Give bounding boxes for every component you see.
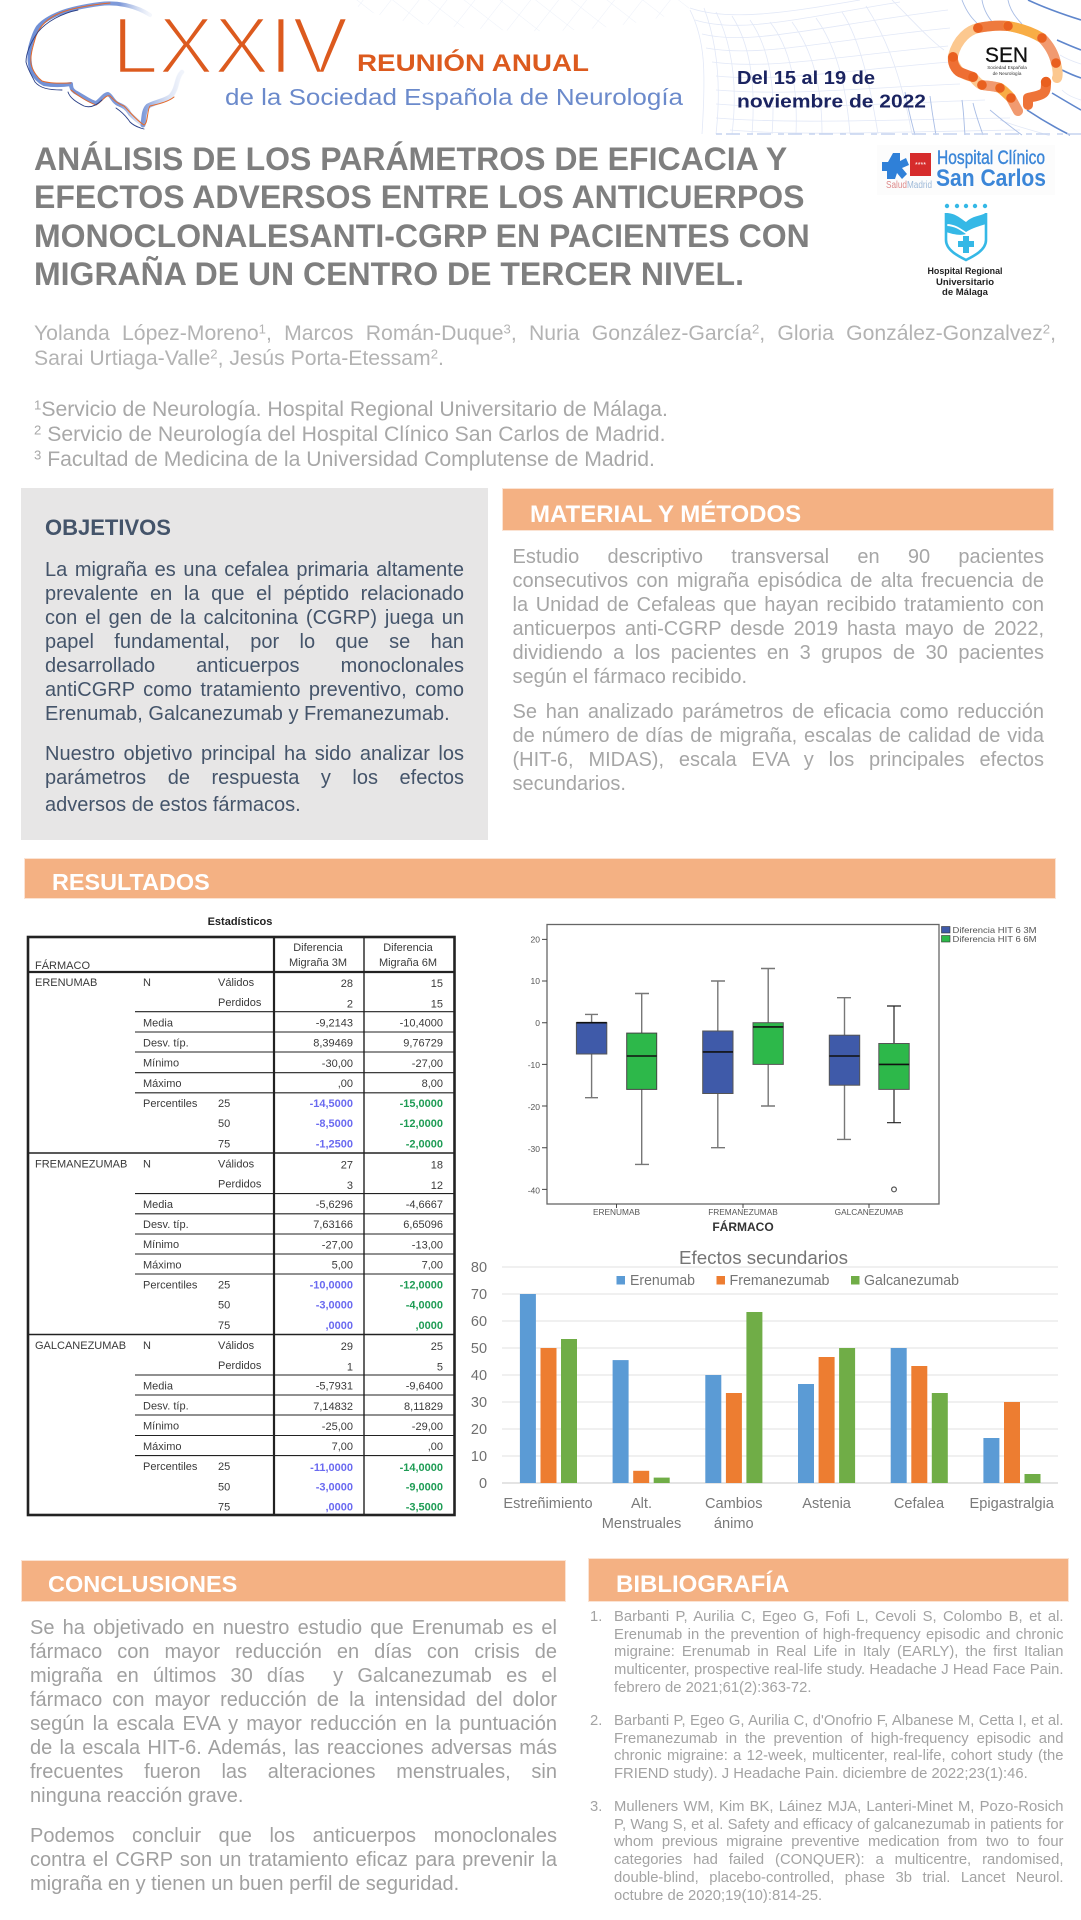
LXXIV numeral: LXXIV — [112, 1, 349, 90]
table group: galcanezumab: GALCANEZUMAB — [35, 1340, 126, 1352]
text: conclusiones — [30, 1617, 557, 1895]
text: reference 1 — [590, 1609, 1064, 1696]
table group: fremanezumab: -4,6667 — [406, 1199, 443, 1211]
table group: galcanezumab: -11,0000 — [310, 1462, 353, 1474]
y axis: -10 — [528, 1060, 540, 1070]
box: Erenumab 3M — [576, 1014, 607, 1098]
table group: erenumab: Percentiles — [143, 1098, 198, 1110]
text: reference 3: P, Wang S, et al. Safety and efficacy of galcanezumab in patients for — [614, 1817, 1064, 1833]
table group: fremanezumab: -5,6296 — [316, 1199, 353, 1211]
authors — [34, 321, 1056, 370]
text: conclusiones: según la escala EVA y mayor reducción en la puntuación — [30, 1713, 557, 1735]
y axis labels: 70 — [471, 1287, 487, 1303]
table group: galcanezumab: -14,0000 — [400, 1462, 443, 1474]
text: objetivos paragraph 2: adversos de estos fármacos. — [45, 794, 301, 816]
y axis: 20 — [531, 934, 540, 944]
table group: erenumab: -10,4000 — [400, 1018, 443, 1030]
table group: fremanezumab: ,0000 — [415, 1320, 443, 1332]
text: objetivos paragraph 1: papel fundamental, por lo que se han — [45, 631, 464, 653]
box: Galcanezumab 3M — [829, 998, 860, 1139]
table group: galcanezumab: Perdidos — [218, 1360, 262, 1372]
bars: Erenumab — [520, 1294, 999, 1483]
table group: fremanezumab: 18 — [431, 1160, 443, 1172]
table group: fremanezumab: 75 — [218, 1320, 230, 1332]
text: reference 2: FRIEND study). J Headache Pain. diciembre de 2022;23(1):46. — [614, 1766, 1028, 1782]
table header — [35, 942, 437, 972]
heading bar: bibliografía — [588, 1558, 1069, 1602]
table group: fremanezumab: 27 — [341, 1160, 353, 1172]
box plot chart — [528, 924, 1037, 1234]
table group: fremanezumab: Máximo — [143, 1259, 182, 1271]
table group: galcanezumab: 5 — [437, 1362, 443, 1374]
logo: Hospital Regional Universitario de Málaga: Hospital Regional — [928, 266, 1002, 277]
table group: fremanezumab: Válidos — [218, 1158, 255, 1170]
text: conclusiones: ninguna reacción grave. — [30, 1785, 243, 1807]
gridlines — [502, 1267, 1058, 1456]
text: reference 1: Erenumab in the prevention of high-frequency episodic and chronic — [614, 1627, 1064, 1643]
table group: fremanezumab: Media — [143, 1199, 174, 1211]
table grid — [28, 937, 455, 1516]
text: conclusiones: de la escala HIT-6. Además, las reacciones adversas más — [30, 1737, 557, 1759]
table group: erenumab: Máximo — [143, 1078, 182, 1090]
table group: galcanezumab: ,00 — [428, 1441, 443, 1453]
y axis — [528, 934, 869, 1208]
table group: fremanezumab: N — [143, 1158, 151, 1170]
table group: galcanezumab: 29 — [341, 1341, 353, 1353]
table group: fremanezumab: 5,00 — [332, 1260, 353, 1272]
x axis title: FÁRMACO — [712, 1219, 774, 1234]
table group: erenumab: 15 — [431, 998, 443, 1010]
text: conclusiones: frecuentes fueron las alteraciones menstruales, sin — [30, 1761, 557, 1783]
bar chart: efectos secundarios — [471, 1247, 1058, 1532]
text: reference 3 — [590, 1799, 1064, 1904]
affiliations — [34, 397, 668, 471]
text: objetivos paragraph 1: prevalente en la que el péptido relacionado — [45, 583, 464, 605]
text: objetivos paragraph 1: antiCGRP como tratamiento preventivo, como — [45, 679, 464, 701]
table group: galcanezumab: 1 — [347, 1362, 353, 1374]
text: material y métodos: (HIT-6, MIDAS), escala EVA y los principales efectos — [512, 749, 1044, 771]
y axis labels: 20 — [471, 1422, 487, 1438]
table group: erenumab: 2 — [347, 998, 353, 1010]
text: reference 1: Barbanti P, Aurilia C, Egeo G, Fofi L, Cevoli S, Colombo B, et al. — [614, 1609, 1064, 1625]
box plot legend: Diferencia HIT 6 6M — [952, 934, 1037, 944]
heading bar: conclusiones — [21, 1560, 566, 1602]
text: material y métodos: Se han analizado parámetros de eficacia como reducción — [512, 701, 1044, 723]
logo: Hospital Regional Universitario de Málaga: Universitario — [936, 277, 994, 288]
box: Galcanezumab 6M — [879, 1006, 909, 1192]
table group: erenumab — [35, 977, 443, 1150]
text: material y métodos — [512, 546, 1044, 795]
table group: fremanezumab: Percentiles — [143, 1280, 198, 1292]
table group: fremanezumab: 6,65096 — [403, 1219, 443, 1231]
text: reference 3: whom previous migraine preventive medication from two to four — [614, 1834, 1064, 1850]
y axis labels: 0 — [479, 1476, 487, 1492]
table group: fremanezumab: 12 — [431, 1180, 443, 1192]
x axis labels: GALCANEZUMAB — [835, 1207, 904, 1217]
bars: Fremanezumab — [540, 1348, 1020, 1483]
y axis: -30 — [528, 1144, 540, 1154]
category labels: Cambios — [705, 1496, 763, 1512]
table group: erenumab: ,00 — [338, 1078, 353, 1090]
plot frame — [547, 924, 939, 1204]
table group: erenumab: -27,00 — [412, 1058, 443, 1070]
text: conclusiones: Se ha objetivado en nuestro estudio que Erenumab es el — [30, 1617, 557, 1639]
x axis labels: ERENUMAB — [593, 1207, 640, 1217]
table group: erenumab: ERENUMAB — [35, 977, 97, 989]
category labels: Cefalea — [894, 1496, 945, 1512]
logo: Hospital Regional Universitario de Málaga — [928, 204, 1002, 298]
text: objetivos paragraph 1: desarrollado anticuerpos monoclonales — [45, 655, 464, 677]
table group: erenumab: -14,5000 — [310, 1098, 353, 1110]
table group: galcanezumab: 25 — [431, 1341, 443, 1353]
logo: Hospital Clínico San Carlos: San Carlos — [936, 165, 1046, 192]
table group: fremanezumab: Desv. típ. — [143, 1219, 189, 1231]
text: reference 1: migraine: Erenumab in Real Life in Italy (EARLY), the first Italian — [614, 1644, 1064, 1660]
table group: galcanezumab: N — [143, 1340, 151, 1352]
y axis labels: 40 — [471, 1368, 487, 1384]
text: material y métodos: según el fármaco recibido. — [512, 666, 747, 688]
heading: objetivos: OBJETIVOS — [45, 515, 171, 540]
text: objetivos paragraph 2: Nuestro objetivo principal ha sido analizar los — [45, 743, 464, 765]
heading bar: resultados — [24, 858, 1056, 899]
category labels: Menstruales — [602, 1516, 681, 1532]
bar legend — [616, 1273, 959, 1289]
icon: SEN logo: Sociedad Española — [987, 65, 1027, 70]
table group: galcanezumab: Media — [143, 1380, 174, 1392]
table header: Diferencia — [383, 942, 434, 954]
table group: erenumab: Media — [143, 1017, 174, 1029]
heading bar: material y métodos: MATERIAL Y MÉTODOS — [530, 501, 801, 528]
table group: galcanezumab: -3,0000 — [316, 1481, 353, 1493]
table group: erenumab: Válidos — [218, 977, 255, 989]
category labels: ánimo — [714, 1516, 754, 1532]
table group: fremanezumab: 25 — [218, 1280, 230, 1292]
text: reference 2 — [590, 1713, 1064, 1782]
authors: Sarai Urtiaga-Valle2, Jesús Porta-Etessam2. — [34, 346, 444, 370]
logo: Hospital Clínico San Carlos: Salud — [886, 180, 907, 191]
table group: galcanezumab: -29,00 — [412, 1421, 443, 1433]
bar legend: Erenumab — [630, 1273, 695, 1289]
table group: erenumab: 50 — [218, 1118, 230, 1130]
text: objetivos paragraph 2: parámetros de respuesta y los efectos — [45, 767, 464, 789]
table group: erenumab: 75 — [218, 1138, 230, 1150]
text: material y métodos: dividiendo a los pacientes en 3 grupos de 30 pacientes — [512, 642, 1044, 664]
box: Erenumab 6M — [627, 994, 657, 1164]
table group: erenumab: -12,0000 — [400, 1118, 443, 1130]
text: objetivos paragraph 1: con el gen de la calcitonina (CGRP) juega un — [45, 607, 464, 629]
table group: fremanezumab: -10,0000 — [310, 1280, 353, 1292]
box plot legend: Diferencia HIT 6 3M — [952, 925, 1037, 935]
category labels: Astenia — [802, 1496, 852, 1512]
text: material y métodos: secundarios. — [512, 773, 626, 795]
authors: Yolanda López-Moreno1, Marcos Román-Duque3, Nuria González-García2, Gloria González-Gonzalvez2, — [34, 321, 1056, 344]
table group: fremanezumab: -4,0000 — [406, 1300, 443, 1312]
text: objetivos paragraph 2 — [45, 743, 464, 816]
table group: fremanezumab: Mínimo — [143, 1239, 179, 1251]
heading bar: conclusiones: CONCLUSIONES — [48, 1571, 237, 1597]
table group: galcanezumab: -3,5000 — [406, 1501, 443, 1513]
title — [34, 141, 810, 292]
header banner — [26, 0, 1081, 136]
text: reference 3: double-blind, placebo-controlled, phase 3b trial. Lancet Neurol. — [614, 1870, 1064, 1886]
table header: Migraña 6M — [379, 957, 437, 969]
table group: fremanezumab: -3,0000 — [316, 1300, 353, 1312]
table group: erenumab: -15,0000 — [400, 1098, 443, 1110]
text: reference 2: 2. — [590, 1713, 602, 1729]
table group: fremanezumab: 50 — [218, 1300, 230, 1312]
table group: erenumab: -2,0000 — [406, 1138, 443, 1150]
title: MIGRAÑA DE UN CENTRO DE TERCER NIVEL. — [34, 256, 744, 292]
table group: fremanezumab: -13,00 — [412, 1240, 443, 1252]
text: reference 1: 1. — [590, 1609, 602, 1625]
heading bar: material y métodos — [502, 488, 1054, 531]
category labels: Estreñimiento — [503, 1496, 593, 1512]
table group: fremanezumab: -27,00 — [322, 1240, 353, 1252]
y axis labels: 10 — [471, 1449, 487, 1465]
table group: erenumab: 9,76729 — [403, 1038, 443, 1050]
table group: erenumab: 25 — [218, 1098, 230, 1110]
affiliations: 3 Facultad de Medicina de la Universidad Complutense de Madrid. — [34, 448, 655, 471]
table group: erenumab: N — [143, 977, 151, 989]
text: conclusiones: fármaco con mayor reducción en días con crisis de — [30, 1641, 557, 1663]
y axis: 0 — [535, 1018, 540, 1028]
table group: erenumab: -1,2500 — [316, 1138, 353, 1150]
box: Fremanezumab 3M — [703, 981, 733, 1148]
dates: noviembre de 2022 — [737, 92, 926, 112]
table group: galcanezumab: ,0000 — [325, 1501, 353, 1513]
icon: SEN logo — [948, 21, 1061, 111]
text: conclusiones: migraña en últimos 30 días y Galcanezumab es el — [30, 1665, 557, 1687]
table group: fremanezumab: -12,0000 — [400, 1280, 443, 1292]
text: material y métodos: de número de días de migraña, escalas de calidad de vida — [512, 725, 1044, 747]
table group: galcanezumab: 25 — [218, 1461, 230, 1473]
table group: erenumab: -30,00 — [322, 1058, 353, 1070]
text: material y métodos: consecutivos con migraña episódica de alta frecuencia de — [512, 570, 1044, 592]
table group: erenumab: 28 — [341, 978, 353, 990]
text: material y métodos: anticuerpos anti-CGRP desde 2019 hasta mayo de 2022, — [512, 618, 1044, 640]
y axis: -40 — [528, 1186, 540, 1196]
text: reference 1: multicenter, prospective real-life study. Headache J Head Face Pain. — [614, 1662, 1064, 1678]
icon: SEN logo: SEN — [985, 44, 1028, 67]
icon: SEN logo: de Neurología — [993, 71, 1022, 76]
table title: Estadísticos — [208, 916, 272, 928]
table group: erenumab: Perdidos — [218, 997, 262, 1009]
text: reference 2: chronic migraine: a 12-week, multicenter, real-life, cohort study (the — [614, 1748, 1064, 1764]
text: reference 3: octubre de 2020;19(10):814-25. — [614, 1888, 822, 1904]
text: objetivos paragraph 1: Erenumab, Galcanezumab y Fremanezumab. — [45, 703, 450, 725]
table group: erenumab: 8,00 — [422, 1078, 443, 1090]
text: objetivos paragraph 1 — [45, 559, 464, 725]
table group: fremanezumab: 7,63166 — [313, 1219, 353, 1231]
table header: Migraña 3M — [289, 957, 347, 969]
logo: Hospital Clínico San Carlos — [877, 145, 1055, 195]
y axis labels: 30 — [471, 1395, 487, 1411]
y axis labels: 80 — [471, 1260, 487, 1276]
text: material y métodos: la Unidad de Cefaleas que hayan recibido tratamiento con — [512, 594, 1044, 616]
y axis: -20 — [528, 1102, 540, 1112]
table group: galcanezumab — [35, 1340, 443, 1513]
table group: erenumab: Desv. típ. — [143, 1038, 189, 1050]
text: conclusiones: fármaco con mayor reducción de la intensidad del dolor — [30, 1689, 557, 1711]
table group: galcanezumab: -9,0000 — [406, 1481, 443, 1493]
table group: galcanezumab: Válidos — [218, 1340, 255, 1352]
logo: Hospital Clínico San Carlos: **** — [915, 162, 926, 169]
text: conclusiones: migraña en y tienen un buen perfil de seguridad. — [30, 1873, 459, 1895]
dates: Del 15 al 19 de — [737, 68, 875, 88]
affiliations: 2 Servicio de Neurología del Hospital Clínico San Carlos de Madrid. — [34, 422, 665, 446]
y axis labels: 60 — [471, 1314, 487, 1330]
table group: fremanezumab: FREMANEZUMAB — [35, 1158, 127, 1170]
bar legend: Galcanezumab — [864, 1273, 959, 1289]
category labels — [503, 1496, 1055, 1532]
text: reference 1: febrero de 2021;61(2):363-72. — [614, 1680, 811, 1696]
table group: galcanezumab: -9,6400 — [406, 1381, 443, 1393]
affiliations: 1Servicio de Neurología. Hospital Regional Universitario de Málaga. — [34, 397, 668, 420]
x axis labels: FREMANEZUMAB — [708, 1207, 778, 1217]
table group: galcanezumab: Mínimo — [143, 1421, 179, 1433]
statistics table — [26, 916, 456, 1516]
x axis labels — [593, 1207, 904, 1217]
table group: galcanezumab: 7,14832 — [313, 1401, 353, 1413]
panel: objetivos — [21, 488, 488, 840]
table group: galcanezumab: Máximo — [143, 1441, 182, 1453]
chart title: Efectos secundarios — [679, 1247, 848, 1268]
table group: fremanezumab: 7,00 — [422, 1260, 443, 1272]
text: reference 2: Fremanezumab in the prevention of high-frequency episodic and — [614, 1731, 1064, 1747]
logo: Hospital Regional Universitario de Málaga: de Málaga — [942, 287, 989, 298]
bar legend: Fremanezumab — [730, 1273, 830, 1289]
bars: Galcanezumab — [561, 1312, 1040, 1483]
title: ANÁLISIS DE LOS PARÁMETROS DE EFICACIA Y — [34, 141, 787, 177]
hospital logos — [882, 148, 1046, 298]
table group: erenumab: -8,5000 — [316, 1118, 353, 1130]
logo: Hospital Clínico San Carlos: Madrid — [907, 180, 932, 191]
table group: galcanezumab: 50 — [218, 1481, 230, 1493]
box: Fremanezumab 6M — [753, 968, 783, 1106]
y axis labels: 50 — [471, 1341, 487, 1357]
table group: erenumab: Mínimo — [143, 1058, 179, 1070]
table group: erenumab: 15 — [431, 978, 443, 990]
decorative waves — [345, 0, 1081, 136]
category labels: Epigastralgia — [970, 1496, 1055, 1512]
table header: Diferencia — [293, 942, 344, 954]
text: reference 3: Mulleners WM, Kim BK, Láinez MJA, Lanteri-Minet M, Pozo-Rosich — [614, 1799, 1064, 1815]
heading bar: bibliografía: BIBLIOGRAFÍA — [616, 1571, 789, 1598]
y axis labels — [471, 1260, 487, 1492]
text: conclusiones: contra el CGRP son un tratamiento eficaz para prevenir la — [30, 1849, 557, 1871]
text: objetivos paragraph 1: La migraña es una cefalea primaria altamente — [45, 559, 464, 581]
sociedad subtitle: de la Sociedad Española de Neurología — [225, 84, 683, 110]
table group: galcanezumab: 7,00 — [332, 1441, 353, 1453]
table group: erenumab: 8,39469 — [313, 1038, 353, 1050]
text: reference 3: 3. — [590, 1799, 602, 1815]
table group: galcanezumab: -5,7931 — [316, 1381, 353, 1393]
box plot legend — [942, 925, 1037, 944]
table group: galcanezumab: 75 — [218, 1501, 230, 1513]
table group: galcanezumab: Percentiles — [143, 1461, 198, 1473]
category labels: Alt. — [631, 1496, 652, 1512]
y axis: 10 — [531, 976, 540, 986]
table group: galcanezumab: 8,11829 — [404, 1401, 443, 1413]
table group: fremanezumab — [35, 1158, 443, 1332]
text: reference 3: categories had failed (CONQUER): a multicentre, randomised, — [614, 1852, 1064, 1868]
table group: fremanezumab: ,0000 — [325, 1320, 353, 1332]
table group: fremanezumab: Perdidos — [218, 1179, 262, 1191]
table group: galcanezumab: -25,00 — [322, 1421, 353, 1433]
table group: fremanezumab: 3 — [347, 1180, 353, 1192]
dates — [737, 68, 926, 112]
title: EFECTOS ADVERSOS ENTRE LOS ANTICUERPOS — [34, 179, 804, 215]
reunión anual: REUNIÓN ANUAL — [357, 49, 589, 77]
text: material y métodos: Estudio descriptivo transversal en 90 pacientes — [512, 546, 1044, 568]
table group: erenumab: -9,2143 — [316, 1018, 353, 1030]
table header: FÁRMACO — [35, 959, 90, 972]
table group: galcanezumab: Desv. típ. — [143, 1401, 189, 1413]
heading bar: resultados: RESULTADOS — [52, 869, 210, 895]
text: conclusiones: Podemos concluir que los anticuerpos monoclonales — [30, 1825, 557, 1847]
icon: brain outline — [26, 3, 182, 129]
title: MONOCLONALESANTI-CGRP EN PACIENTES CON — [34, 218, 810, 254]
text: reference 2: Barbanti P, Egeo G, Aurilia C, d'Onofrio F, Albanese M, Cetta I, et al. — [614, 1713, 1064, 1729]
